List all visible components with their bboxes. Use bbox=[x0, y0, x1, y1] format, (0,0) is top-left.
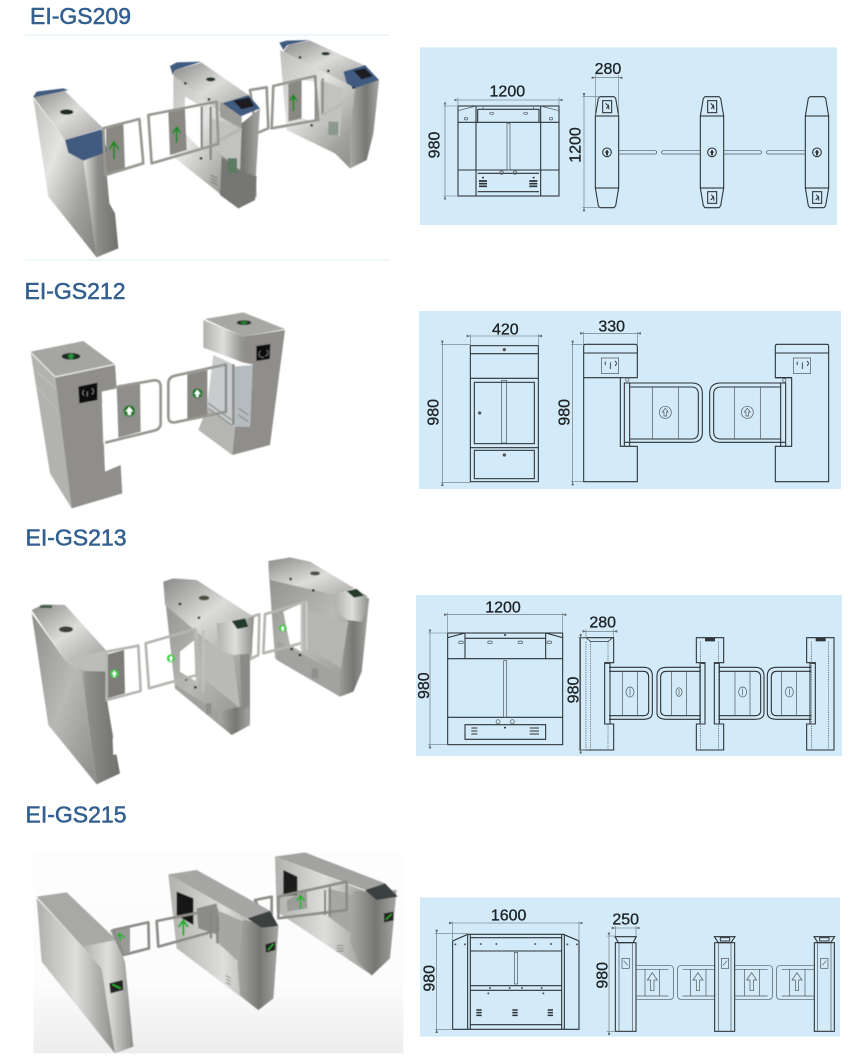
left post bbox=[37, 892, 149, 1053]
front view bbox=[453, 934, 579, 1029]
dimensions: side view bbox=[566, 615, 616, 750]
side view: post 3 bbox=[814, 937, 835, 1031]
panel: EI-GS212 technical drawing bbox=[419, 311, 841, 489]
dimensions: side view: 980 bbox=[557, 399, 574, 426]
side view: post 2 bbox=[714, 937, 735, 1031]
side view: left post bbox=[584, 344, 637, 482]
left post bbox=[32, 604, 141, 784]
dimensions: front view: 420 bbox=[492, 321, 519, 338]
dimensions: front view: 980 bbox=[421, 965, 438, 992]
panel: EI-GS213 technical drawing bbox=[416, 595, 842, 756]
left post bbox=[31, 341, 122, 508]
dimensions: front view bbox=[421, 908, 579, 1029]
dimensions: side view bbox=[557, 318, 637, 482]
middle post bbox=[148, 62, 260, 208]
side view: left gate bbox=[624, 382, 702, 446]
dimensions: top view bbox=[568, 61, 621, 208]
top view: left post bbox=[595, 97, 657, 208]
heading: EI-GS213: EI-GS213 bbox=[26, 524, 126, 550]
side view: post 1 bbox=[615, 937, 636, 1031]
dimensions: side view bbox=[595, 912, 639, 1031]
dimensions: side view: 980 bbox=[595, 962, 612, 989]
panel: EI-GS215 technical drawing bbox=[420, 897, 840, 1037]
dimensions: front view bbox=[426, 84, 559, 196]
right post bbox=[272, 40, 379, 168]
side view: gate pair 2 bbox=[735, 966, 814, 999]
side view: gate pair 2 bbox=[714, 663, 815, 724]
left post bbox=[33, 88, 143, 257]
heading: EI-GS209: EI-GS209 bbox=[30, 3, 131, 29]
right gate bbox=[168, 364, 233, 425]
side view: right gate bbox=[710, 382, 786, 446]
top view: middle post bbox=[662, 97, 762, 208]
side view: gate pair 1 bbox=[636, 966, 715, 999]
heading: EI-GS212: EI-GS212 bbox=[24, 278, 126, 304]
top view: right post bbox=[767, 97, 829, 208]
dimensions: front view: 1200 bbox=[490, 84, 525, 101]
middle post bbox=[146, 578, 254, 735]
heading: EI-GS215: EI-GS215 bbox=[26, 802, 126, 828]
rear gate of middle post bbox=[255, 897, 272, 917]
dimensions: front view: 1200 bbox=[485, 600, 521, 617]
product photo: EI-GS212 rectangular turnstile bbox=[31, 312, 285, 508]
dimensions: front view bbox=[425, 321, 538, 482]
left gate bbox=[105, 380, 161, 443]
side view: post 2 bbox=[696, 638, 724, 750]
side view: gate pair 1 bbox=[605, 663, 705, 724]
dimensions: front view: 980 bbox=[416, 672, 433, 699]
side view: post 1 bbox=[580, 638, 614, 750]
right post bbox=[263, 557, 369, 697]
right post bbox=[275, 852, 398, 976]
side view: right post bbox=[775, 344, 829, 482]
dimensions: top view: 1200 bbox=[568, 127, 585, 163]
side view: post 3 bbox=[807, 638, 834, 750]
front view bbox=[470, 346, 538, 482]
dimensions: side view: 980 bbox=[566, 677, 583, 703]
panel: EI-GS209 technical drawing bbox=[420, 47, 837, 225]
right post bbox=[198, 312, 285, 455]
dimensions: front view bbox=[416, 600, 563, 745]
dimensions: front view: 1600 bbox=[491, 908, 527, 925]
product photo: EI-GS215 turnstile on studio background bbox=[33, 851, 403, 1053]
rear gate of middle post bbox=[250, 87, 268, 133]
dimensions: front view: 980 bbox=[425, 399, 442, 426]
dimensions: side view: 280 bbox=[589, 615, 616, 632]
dimensions: side view: 330 bbox=[598, 318, 625, 335]
product photo: EI-GS213 curved steel turnstile bbox=[32, 557, 369, 784]
front view bbox=[458, 106, 559, 196]
dimensions: top view: 280 bbox=[595, 61, 621, 78]
rear gate of middle post bbox=[251, 614, 259, 659]
middle post bbox=[157, 870, 278, 1010]
front view bbox=[448, 633, 563, 745]
dimensions: front view: 980 bbox=[426, 132, 443, 158]
dimensions: side view: 250 bbox=[612, 912, 639, 929]
product photo: EI-GS209 turnstile with blue caps bbox=[25, 35, 390, 260]
